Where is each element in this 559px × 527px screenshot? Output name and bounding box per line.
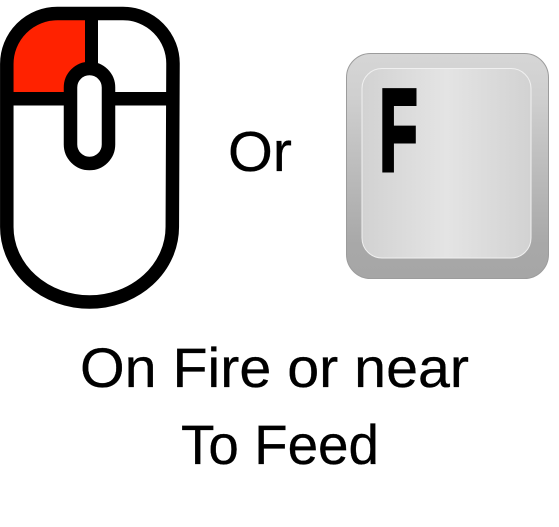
connector word: Or: Or xyxy=(228,120,292,184)
button divider vertical xyxy=(85,14,98,74)
mouse body outline xyxy=(7,14,173,302)
icon: keyboard F key xyxy=(346,54,548,278)
key top xyxy=(362,68,531,258)
key letter F: F xyxy=(380,65,417,195)
caption line 1: On Fire or near xyxy=(80,336,469,399)
caption line 2: To Feed xyxy=(181,413,379,476)
button divider horizontal xyxy=(10,92,170,106)
scroll wheel xyxy=(70,68,108,164)
icon: computer mouse with left button highlighted xyxy=(7,14,173,302)
left mouse button highlight xyxy=(13,20,86,92)
key base xyxy=(346,54,548,278)
